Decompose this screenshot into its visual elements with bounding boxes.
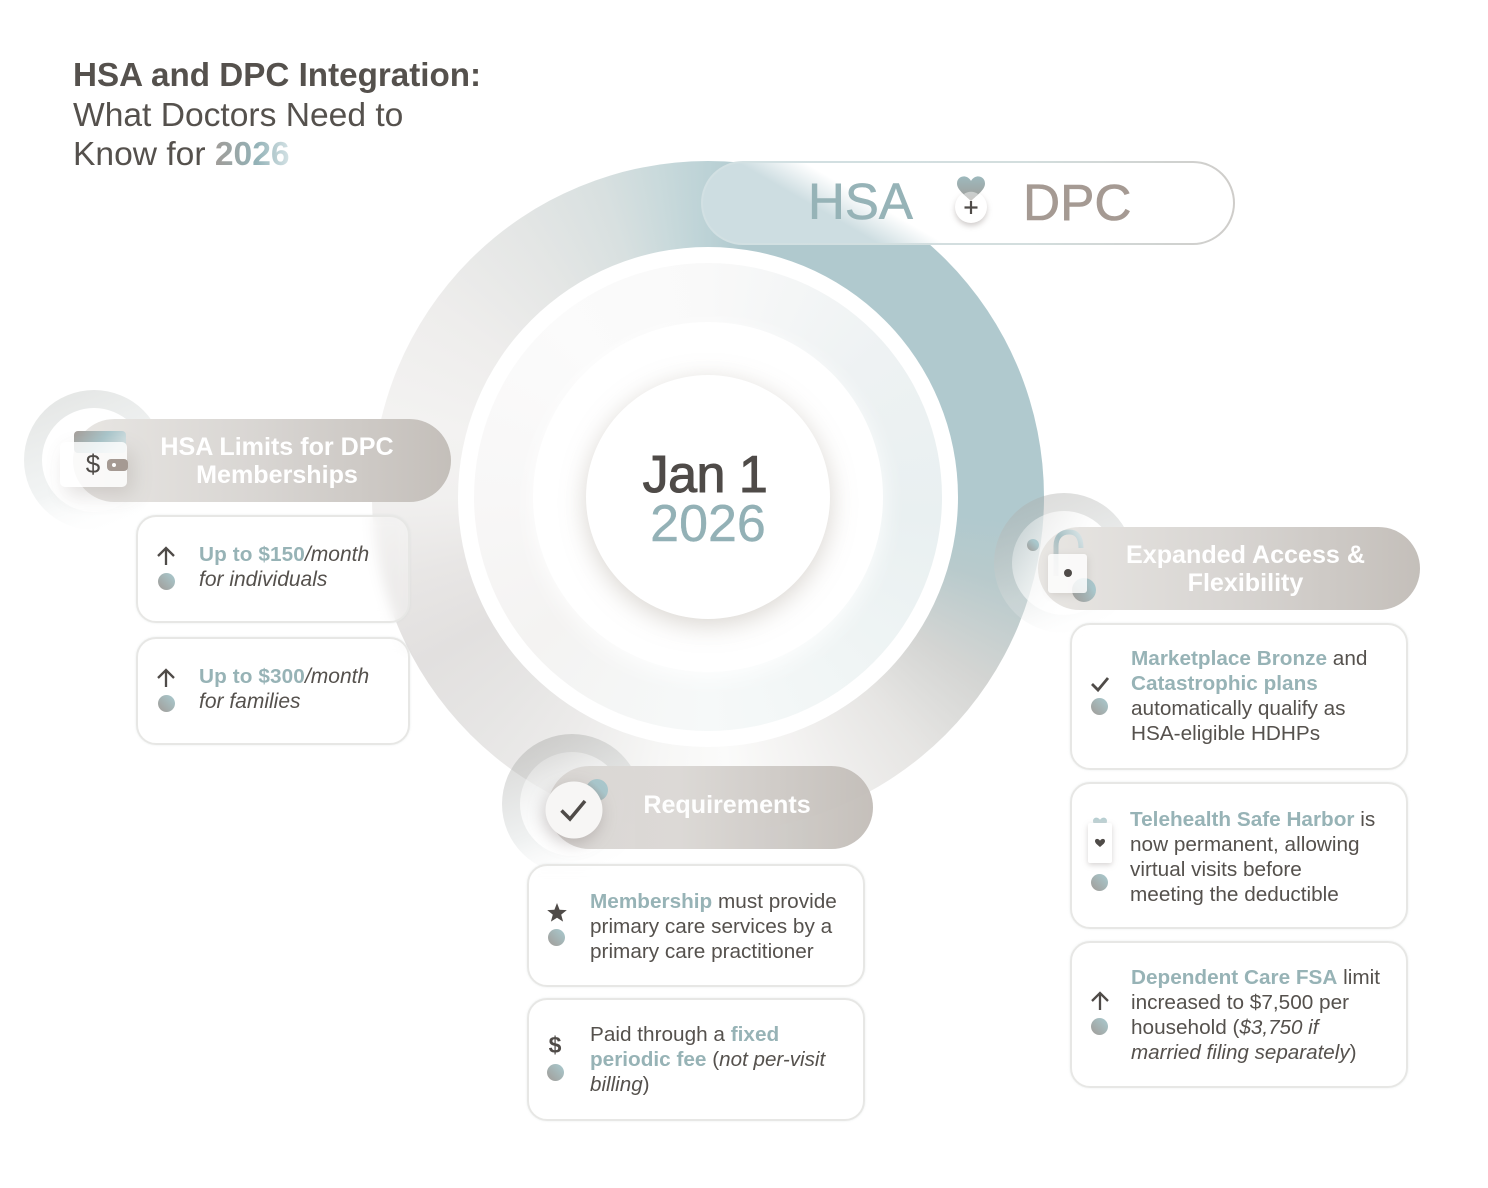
label: DPC: DPC [1023, 173, 1132, 231]
card: families [136, 637, 410, 745]
text [590, 890, 837, 963]
bullet dot [158, 573, 175, 590]
text [590, 1023, 826, 1096]
heading text [1126, 541, 1365, 597]
text: now permanent, allowing [1130, 833, 1360, 856]
inner white disc [533, 322, 883, 672]
icon rings [996, 493, 1124, 618]
card: individuals [136, 515, 410, 623]
text: Marketplace Bronze and [1131, 647, 1367, 670]
text: increased to $7,500 per [1131, 991, 1349, 1014]
heading text: Expanded Access & [1126, 541, 1365, 569]
central ring graphic [372, 161, 1044, 792]
center date disc [586, 375, 830, 619]
bullet dot [1091, 698, 1108, 715]
heading pill [73, 419, 451, 502]
text: primary care practitioner [590, 940, 814, 963]
HSA + DPC pill [701, 161, 1235, 245]
icon: dollar: $ [549, 1032, 561, 1058]
middle tinted disc [474, 263, 942, 731]
icon: check [1091, 677, 1109, 692]
date: Jan 1: Jan 1 [643, 446, 767, 504]
icon: wallet [60, 431, 138, 502]
text [199, 665, 369, 713]
title: What Doctors Need to [73, 96, 403, 134]
section: expanded access [996, 493, 1420, 1088]
label: HSA: HSA [808, 173, 913, 230]
icon: check badge [537, 779, 608, 850]
heading text: HSA Limits for DPC [160, 433, 394, 461]
section: HSA limits [24, 390, 451, 746]
text: primary care services by a [590, 915, 832, 938]
text: Membership must provide [590, 890, 837, 913]
text: married filing separately) [1131, 1041, 1357, 1064]
center date text [642, 446, 767, 553]
white separator disc [458, 247, 958, 747]
icon: open padlock [1027, 530, 1096, 602]
text: Telehealth Safe Harbor is [1130, 808, 1375, 831]
text [1130, 808, 1375, 906]
title: HSA and DPC Integration: [73, 57, 481, 94]
icon: star [547, 903, 567, 922]
card: fixed fee [527, 998, 865, 1121]
icon: arrow up [1091, 992, 1109, 1010]
text: Dependent Care FSA limit [1131, 966, 1380, 989]
text: meeting the deductible [1130, 883, 1339, 906]
text: household ($3,750 if [1131, 1016, 1318, 1039]
heading text: Requirements [643, 791, 811, 819]
icon: wallet: $ [86, 449, 101, 479]
text: Up to $150/month [199, 543, 369, 566]
text: Up to $300/month [199, 665, 369, 688]
heading text [160, 433, 394, 489]
title [73, 57, 481, 173]
text: automatically qualify as [1131, 697, 1346, 720]
heading text: Memberships [196, 461, 358, 489]
text: periodic fee (not per-visit [590, 1048, 825, 1071]
icon rings [502, 734, 630, 856]
icon: arrow up [157, 668, 175, 687]
section: requirements [502, 734, 873, 1122]
text: billing) [590, 1073, 650, 1096]
heading pill [1038, 527, 1420, 610]
text [199, 543, 369, 591]
text: virtual visits before [1130, 858, 1302, 881]
outer gradient ring [372, 161, 1044, 833]
icon: phone with heart [1086, 818, 1114, 868]
bullet dot [548, 929, 565, 946]
bullet dot [1091, 1018, 1108, 1035]
card: dependent care FSA [1070, 941, 1408, 1088]
icon rings [24, 390, 150, 510]
bullet dot [158, 695, 175, 712]
text: for families [199, 690, 301, 713]
text: for individuals [199, 568, 327, 591]
text [1131, 647, 1367, 745]
card: marketplace plans [1070, 623, 1408, 770]
icon: arrow up [157, 546, 175, 565]
text: HSA-eligible HDHPs [1131, 722, 1320, 745]
heading pill [548, 766, 873, 849]
bullet dot [1091, 874, 1108, 891]
title: Know for 2026 [73, 136, 290, 173]
text: Catastrophic plans [1131, 672, 1318, 695]
bullet dot [547, 1064, 564, 1081]
icon: heart and plus [952, 176, 990, 228]
date: 2026: 2026 [650, 495, 766, 553]
text: Paid through a fixed [590, 1023, 779, 1046]
text [1131, 966, 1380, 1064]
heading text: Flexibility [1188, 569, 1303, 597]
card: telehealth [1070, 782, 1408, 929]
card: membership [527, 864, 865, 987]
